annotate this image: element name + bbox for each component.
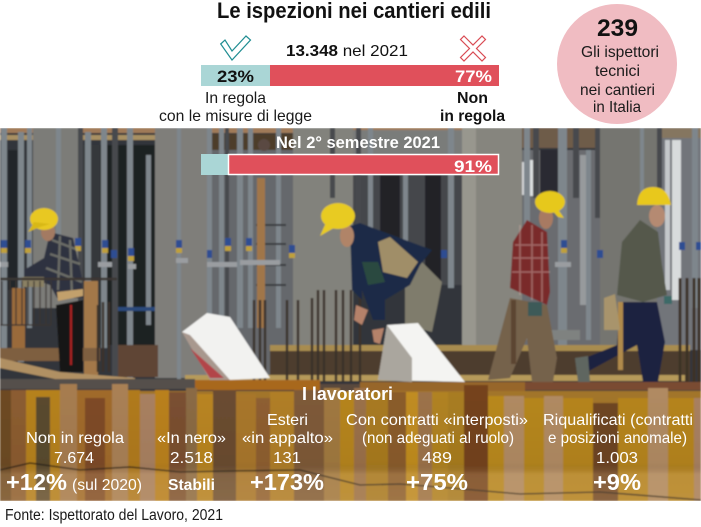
formwork planks <box>0 384 701 501</box>
block 1 <box>182 313 270 380</box>
rail grid <box>0 279 117 325</box>
dark gaps <box>8 150 20 290</box>
heading: workers: I lavoratori <box>302 384 393 404</box>
label: in regola <box>159 90 312 125</box>
rebar centre <box>98 290 360 382</box>
stat: non in regola <box>6 430 142 495</box>
worker 3 <box>488 191 565 382</box>
left wood structure <box>118 345 158 377</box>
rebar right <box>680 278 699 382</box>
total inspections: 13.348 nel 2021 <box>286 43 408 60</box>
callout: inspectors circle: Gli ispettori <box>581 44 659 61</box>
bar: 2021 share: 77% <box>455 67 492 86</box>
bar: second semester share: 91% <box>454 157 492 176</box>
label: non in regola: Non <box>457 90 488 107</box>
source: Fonte: Ispettorato del Lavoro, 2021 <box>5 507 223 524</box>
rubble band <box>0 379 195 389</box>
callout: inspectors circle <box>557 4 677 124</box>
stat: in nero: «In nero» <box>157 430 226 447</box>
icon: cross mark <box>460 36 486 61</box>
callout: inspectors circle: tecnici <box>595 63 640 80</box>
callout: inspectors circle: 239 <box>597 15 638 42</box>
worker 2 <box>320 203 442 344</box>
stat: riqualificati: e posizioni anomale) <box>548 430 687 447</box>
blue scaffold <box>118 307 155 311</box>
bar: 2021 share: 23% <box>217 67 254 86</box>
stat: esteri in appalto: «in appalto» <box>242 430 333 447</box>
worker 4 <box>575 187 672 382</box>
callout: inspectors circle: nei cantieri <box>580 82 655 99</box>
stat: non in regola: 7.674 <box>54 450 94 467</box>
label: non in regola: in regola <box>440 108 505 125</box>
worker 1 <box>22 208 83 372</box>
top wooden strip <box>0 128 701 133</box>
stat: non in regola: Non in regola <box>26 430 124 447</box>
label: in regola: In regola <box>205 90 266 107</box>
bar: 2021 share <box>201 65 499 86</box>
stat: riqualificati: Riqualificati (contratti <box>543 412 693 429</box>
stat: contratti interposti: (non adeguati al ruolo) <box>362 430 514 447</box>
stat: in nero <box>157 430 226 494</box>
stat: esteri in appalto: Esteri <box>267 412 308 429</box>
stat: riqualificati: +9% <box>593 469 641 495</box>
steel poles <box>1 128 698 388</box>
heading: second semester: Nel 2° semestre 2021 <box>276 134 440 152</box>
stat: in nero: Stabili <box>168 477 215 494</box>
photo: construction site with workers <box>0 128 701 501</box>
pole clamps <box>1 238 701 258</box>
bar: second semester share <box>201 154 498 176</box>
stat: esteri in appalto: +173% <box>250 469 324 495</box>
stat: non in regola: (sul 2020) <box>72 477 142 494</box>
stat: riqualificati <box>543 412 693 495</box>
icon: check mark <box>221 36 250 60</box>
label: non in regola <box>440 90 505 125</box>
stat: esteri in appalto: 131 <box>273 450 301 467</box>
stat: contratti interposti: Con contratti «interposti» <box>346 412 528 429</box>
stat: non in regola: +12% <box>6 469 67 495</box>
label: in regola: con le misure di legge <box>159 108 312 125</box>
concrete columns <box>33 128 80 308</box>
stat: in nero: 2.518 <box>170 450 213 467</box>
callout: inspectors circle: in Italia <box>593 99 641 116</box>
stat: esteri in appalto <box>242 412 333 495</box>
distant worker head <box>258 139 270 151</box>
stat: contratti interposti: +75% <box>406 469 468 495</box>
ladder <box>256 225 286 285</box>
stat: contratti interposti: 489 <box>422 450 452 467</box>
block 2 <box>378 323 465 382</box>
stat: riqualificati: 1.003 <box>596 450 638 467</box>
lower background strips <box>270 345 690 351</box>
stat: contratti interposti <box>346 412 528 495</box>
